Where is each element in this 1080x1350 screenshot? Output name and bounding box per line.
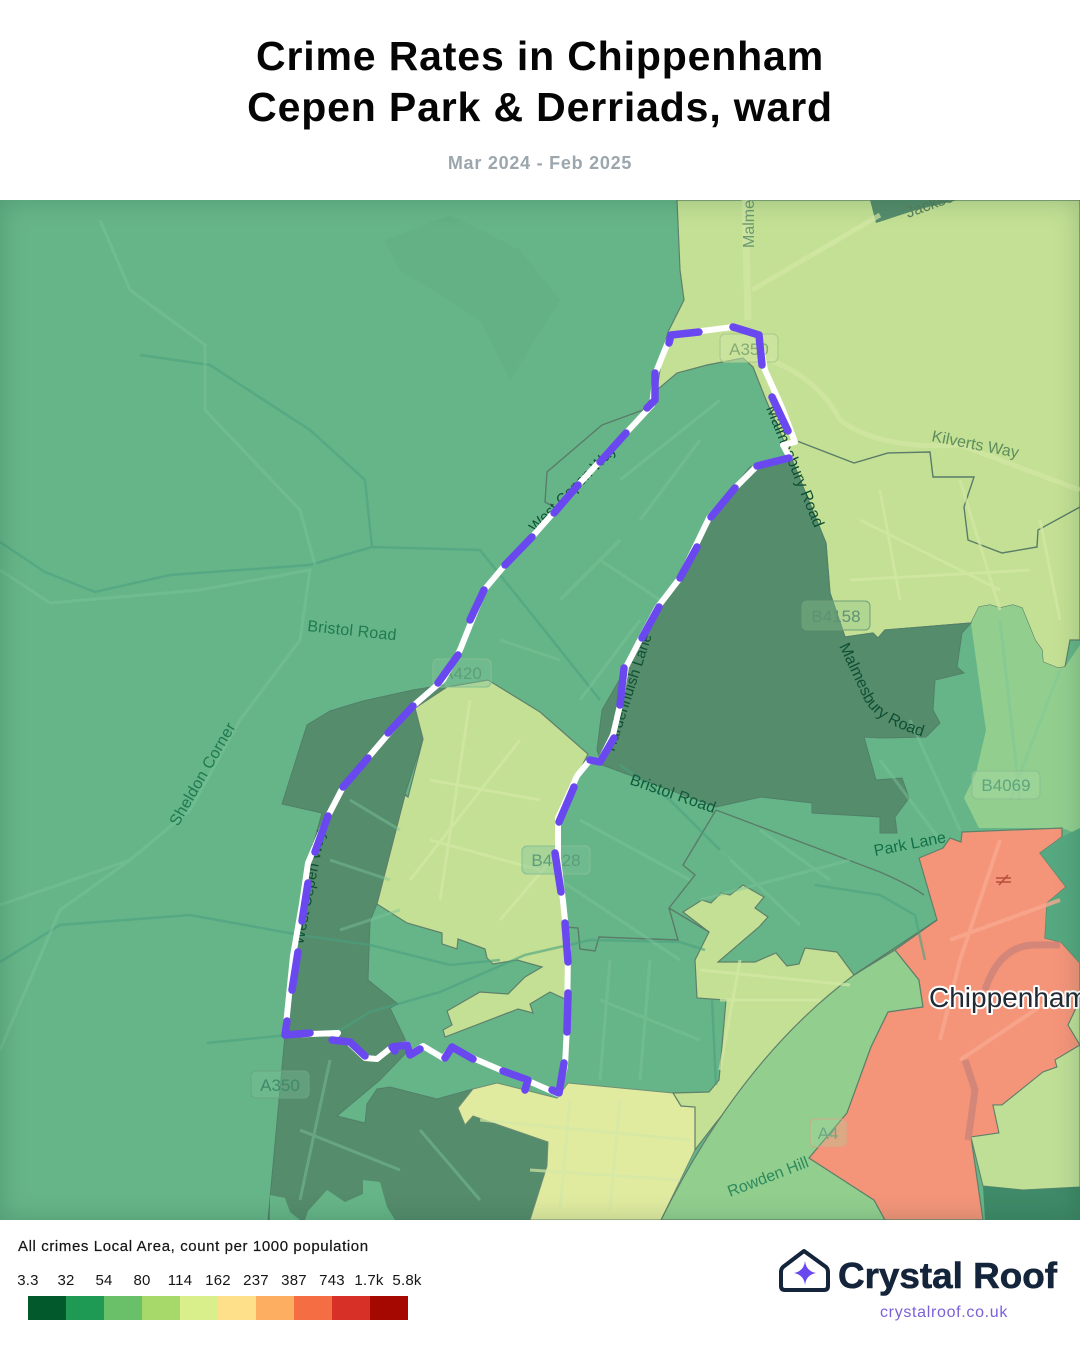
roads bbox=[0, 220, 1060, 1200]
legend values: 1.7k bbox=[354, 1272, 384, 1289]
logo: Crystal Roof bbox=[779, 1249, 1058, 1296]
boundary lines bbox=[545, 390, 1080, 975]
region: east of town centre bbox=[1040, 828, 1080, 963]
road shield: A350 north: A350 bbox=[729, 340, 769, 359]
title bbox=[247, 33, 833, 130]
road shield: B4069: B4069 bbox=[981, 776, 1031, 795]
legend values: 54 bbox=[95, 1272, 113, 1289]
ward boundary bbox=[285, 327, 795, 1094]
road label: Rowden Hill: Rowden Hill bbox=[725, 1154, 811, 1201]
region: east mid-light area bbox=[964, 605, 1080, 835]
icon: railway station bbox=[996, 875, 1011, 885]
road shield: A4: A4 bbox=[818, 1124, 838, 1143]
road label: Hardenhuish Lane: Hardenhuish Lane bbox=[602, 631, 656, 753]
road label: Malmesbury Road north: Malmesbury Road bbox=[762, 403, 827, 530]
date range subtitle: Mar 2024 - Feb 2025 bbox=[448, 153, 632, 173]
region: top right dark patch bbox=[870, 200, 958, 223]
road label: Kilverts Way: Kilverts Way bbox=[930, 428, 1020, 462]
road shield: A350 south: A350 bbox=[260, 1076, 300, 1095]
legend values: 114 bbox=[168, 1272, 192, 1289]
legend values: 237 bbox=[243, 1272, 269, 1289]
legend title: All crimes Local Area, count per 1000 population bbox=[18, 1238, 369, 1255]
website link text: crystalroof.co.uk bbox=[880, 1304, 1008, 1321]
road shield: B4158 bbox=[802, 601, 870, 630]
legend values: 80 bbox=[133, 1272, 151, 1289]
legend values: 743 bbox=[319, 1272, 345, 1289]
rivers bbox=[0, 355, 925, 1085]
region: south east light area bbox=[971, 1000, 1080, 1190]
region: south east dark corner bbox=[983, 1186, 1080, 1220]
road label: Malmesbury Road east: Malmesbury Road bbox=[840, 642, 925, 736]
road shield: B4528 bbox=[522, 846, 590, 874]
region: south east mid-light band bbox=[661, 950, 923, 1220]
road label: Sheldon Corner: Sheldon Corner bbox=[167, 719, 240, 829]
road shield: A420: A420 bbox=[442, 664, 482, 683]
road label: West Cepen Way lower: West Cepen Way bbox=[290, 828, 329, 946]
region: south west mid green pockets bbox=[270, 1180, 395, 1220]
icon: house with star bbox=[781, 1251, 828, 1290]
region: central east dark bbox=[597, 460, 971, 833]
road shield: B4528: B4528 bbox=[531, 851, 581, 870]
wordmark: Crystal Roof bbox=[838, 1255, 1058, 1296]
region: south central light area bbox=[673, 885, 854, 1150]
legend colour bar bbox=[28, 1296, 408, 1320]
ward outline: purple dashes bbox=[285, 327, 789, 1093]
legend values: 5.8k bbox=[392, 1272, 422, 1289]
road label: Bristol Road east: Bristol Road bbox=[628, 772, 718, 817]
legend values: 3.3 bbox=[17, 1272, 39, 1289]
legend values: 387 bbox=[281, 1272, 307, 1289]
region: town centre high crime area bbox=[809, 828, 1080, 1220]
choropleth map bbox=[0, 200, 1080, 1220]
road shield: A350 south bbox=[251, 1071, 309, 1098]
road label: Bristol Road west: Bristol Road bbox=[307, 618, 397, 644]
road shield: A420 bbox=[433, 659, 491, 687]
ward outline: white line bbox=[285, 327, 795, 1094]
road shield: B4069 bbox=[972, 771, 1040, 799]
road shield: A350 north bbox=[720, 334, 778, 362]
title: Crime Rates in Chippenham bbox=[256, 33, 824, 79]
legend values: 162 bbox=[205, 1272, 231, 1289]
legend values: 32 bbox=[57, 1272, 75, 1289]
road shield: A4 bbox=[810, 1119, 847, 1147]
region: central ward light area bbox=[377, 680, 588, 1037]
legend values bbox=[17, 1272, 422, 1289]
region: north east light area bbox=[657, 200, 1080, 668]
road shield: B4158: B4158 bbox=[811, 607, 861, 626]
road label: Park Lane: Park Lane bbox=[873, 829, 947, 860]
road label: West Cepen Way upper: West Cepen Way bbox=[526, 442, 620, 536]
title: Cepen Park & Derriads, ward bbox=[247, 84, 833, 130]
region: western dark area bbox=[268, 685, 548, 1220]
region: south light area bbox=[458, 1083, 695, 1220]
